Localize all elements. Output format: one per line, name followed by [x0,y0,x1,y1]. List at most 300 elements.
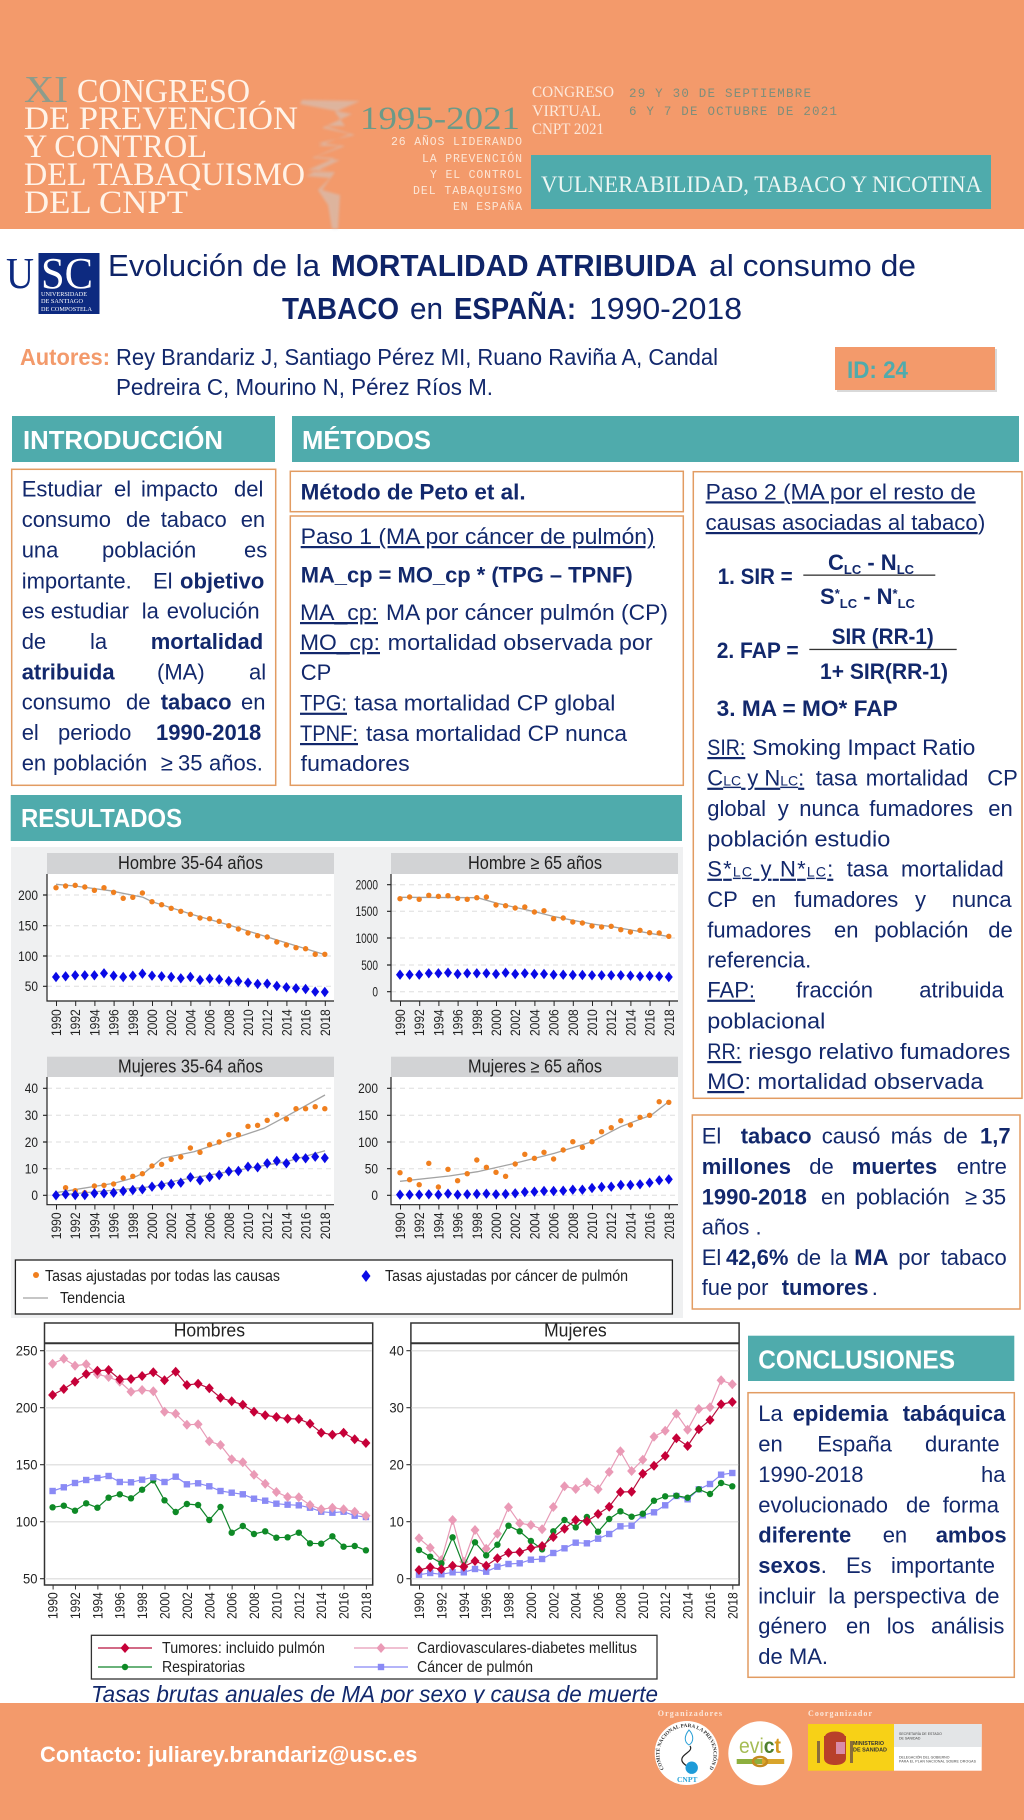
chart: Mujeres ≥ 65 años: Mujeres ≥ 65 años [468,1056,602,1076]
chart: Hombres por causa: 2010 [269,1592,285,1619]
formula: SIR: LC [844,562,862,577]
text block: definiciones paso 2: de [988,917,1013,942]
panel: resultados principales: 35 [982,1184,1006,1209]
chart: Hombres por causa: 50 [23,1571,38,1587]
chart: Mujeres por causa: 2002 [545,1592,562,1619]
panel: conclusiones: sexos [758,1553,821,1578]
panel: resultados principales: tumores [782,1275,868,1300]
panel: conclusiones: epidemia [793,1401,889,1426]
text block: introducción: años. [209,750,263,775]
chart: Hombres por causa: 250 [16,1343,38,1359]
panel: conclusiones: La [758,1401,784,1426]
text block: introducción: atribuida [22,659,115,684]
congress format: VIRTUAL [532,103,601,120]
text block: introducción: es [244,538,267,563]
panel: conclusiones: en [846,1614,870,1639]
chart: Mujeres por causa: 2018 [724,1592,741,1619]
text block: introducción: la [90,629,108,654]
chart: Hombre ≥ 65 años: 1000 [356,930,378,946]
chart: Mujeres por causa: 1992 [434,1592,450,1619]
text block: definiciones paso 2 [707,735,1018,1094]
chart: Hombre 35-64 años: 50 [25,978,38,994]
anniversary tagline: LA PREVENCIÓN [422,152,522,166]
chart: Mujeres ≥ 65 años: 1998 [469,1212,485,1239]
legend: tasas ajustadas [15,1260,672,1314]
legend: causas de muerte: Cardiovasculares-diabetes mellitus [417,1640,637,1657]
panel: resultados principales: millones [702,1154,791,1179]
chart: Hombre ≥ 65 años: Hombre ≥ 65 años [468,853,602,873]
chart: Mujeres ≥ 65 años: 1992 [411,1212,427,1239]
title: TABACO [282,291,399,326]
chart: Mujeres por causa: Mujeres [544,1321,607,1341]
chart: Mujeres por causa: 2004 [568,1592,584,1619]
heading: paso 2 [706,479,985,535]
legend: causas de muerte [91,1635,657,1679]
chart: Hombres por causa: 2000 [157,1592,173,1619]
heading: introducción: INTRODUCCIÓN [23,425,223,455]
icon: smoke wisp [300,100,360,229]
logo: USC: SC [41,249,93,298]
panel: conclusiones: importante [891,1553,995,1578]
text block: definiciones paso 2: en [834,917,858,942]
logo: Ministerio de Sanidad: MINISTERIO [853,1741,885,1747]
text block: introducción: periodo [58,720,131,745]
text block: definiciones paso 2: CP [707,887,738,912]
chart: Mujeres 35-64 años: 10 [25,1161,38,1177]
chart: Mujeres 35-64 años: 2000 [144,1212,160,1239]
text block: definiciones paso 2: atribuida [919,978,1004,1003]
title: congress name: Y CONTROL [24,129,207,165]
title: congress name [24,69,305,221]
chart: Hombre 35-64 años: 200 [18,887,38,903]
chart: Hombres por causa: 2004 [201,1592,218,1619]
text block: definiciones paso 2: poblacional [707,1008,825,1033]
logo: USC: UNIVERSIDADE [41,292,87,298]
text block: introducción: 35 [178,750,202,775]
chart: Mujeres por causa: 2006 [590,1592,606,1619]
chart: Mujeres 35-64 años: 20 [25,1134,38,1150]
badge: ID [835,347,997,392]
formula: SIR: LC [897,562,915,577]
chart: Hombre 35-64 años: 1994 [87,1009,103,1036]
title: congress name: DEL TABAQUISMO [24,157,305,193]
logo: USC: DE SANTIAGO [41,299,83,305]
heading: introducción [12,416,275,462]
title: ESPAÑA: [454,291,576,326]
panel: resultados principales: más [891,1123,932,1148]
legend: causas de muerte: Respiratorias [162,1659,245,1676]
chart: Mujeres por causa: 1994 [456,1592,472,1619]
chart: Hombre 35-64 años: 1996 [106,1009,122,1036]
title: congress name: CONGRESO [77,73,250,110]
text block: definiciones paso 1: tasa mortalidad CP global [354,691,615,716]
logo: CNPT [654,1721,719,1785]
theme banner: VULNERABILIDAD, TABACO Y NICOTINA [541,172,982,197]
chart: Mujeres 35-64 años: 2018 [317,1212,333,1239]
chart: Mujeres por causa: 2000 [523,1592,539,1619]
panel: conclusiones: ambos [936,1523,1007,1548]
panel: resultados principales: en [821,1184,845,1209]
label: coorganizador: Coorganizador [808,1709,872,1718]
chart: Mujeres ≥ 65 años: 2002 [507,1212,523,1239]
text block: definiciones paso 2: S*LC y N*LC: [707,857,833,882]
text block: introducción: importante. [22,568,132,593]
chart: Mujeres 35-64 años: 2002 [163,1212,179,1239]
text block: introducción: ≥ [161,750,173,775]
text block: introducción: tabaco [161,690,232,715]
chart: Mujeres por causa: 1990 [411,1592,427,1619]
logo: Ministerio de Sanidad: DE SANIDAD [853,1748,887,1754]
panel: conclusiones: perspectiva [853,1583,967,1608]
panel: resultados principales: El [702,1245,721,1270]
panel: conclusiones: ha [981,1462,1006,1487]
chart: Mujeres por causa: 2012 [657,1592,673,1619]
chart: Mujeres por causa: 1998 [501,1592,517,1619]
chart: Hombre 35-64 años: 2018 [317,1009,333,1036]
chart: Mujeres 35-64 años: 2014 [279,1212,295,1239]
panel: resultados principales: muertes [852,1154,937,1179]
text block: introducción: una [22,538,59,563]
panel: conclusiones: evolucionado [758,1492,888,1517]
formula: SIR: 1. SIR = [718,564,793,589]
chart: Hombre ≥ 65 años: 1500 [356,903,378,919]
heading: paso 2: Paso 2 (MA por el resto de [706,479,976,504]
chart: Mujeres ≥ 65 años: 100 [358,1134,378,1150]
text block: introducción: El [153,568,173,593]
text block: definiciones paso 1: MA_cp: [300,600,378,625]
chart: Hombres por causa: 1994 [90,1592,106,1619]
text block: definiciones paso 2: y [915,887,926,912]
panel: conclusiones: Es [846,1553,872,1578]
chart: Mujeres ≥ 65 años: 1996 [450,1212,466,1239]
chart: Mujeres por causa: 2016 [702,1592,718,1619]
chart: Hombres por causa: 2002 [179,1592,195,1619]
text block: introducción: el [22,720,39,745]
chart: Mujeres 35-64 años: 1992 [67,1212,83,1239]
chart: Mujeres 35-64 años: 2010 [240,1212,256,1239]
congress format: CONGRESO [532,84,614,101]
text block: introducción [22,477,267,775]
text block: introducción: población [53,750,147,775]
panel: conclusiones: diferente [758,1523,851,1548]
text block: introducción: la [142,598,160,623]
chart: Hombre ≥ 65 años [356,853,678,1036]
panel: conclusiones: forma [943,1492,1000,1517]
logo: Ministerio de Sanidad: DE SANIDAD [899,1736,921,1740]
text block: introducción: mortalidad [151,629,263,654]
formula: SIR: * [893,586,899,601]
formula: SIR: C [828,550,844,575]
chart: Hombre ≥ 65 años: 2016 [642,1009,658,1036]
authors [20,344,718,400]
text block: definiciones paso 2: SIR: [707,735,745,760]
text block: definiciones paso 2: en [752,887,776,912]
congress format: CNPT 2021 [532,121,604,138]
chart: Mujeres 35-64 años: 40 [25,1080,38,1096]
chart: Mujeres por causa: 2008 [613,1592,629,1619]
panel: resultados principales: tabaco [741,1123,812,1148]
chart: Hombres por causa: 1990 [45,1592,61,1619]
panel: conclusiones: en [883,1523,907,1548]
chart: Hombre 35-64 años: 2016 [298,1009,314,1036]
logo: Ministerio de Sanidad: PARA EL PLAN NACIONAL SOBRE DROGAS [899,1760,977,1764]
text block: introducción: evolución [167,598,260,623]
title [108,248,916,326]
chart: Mujeres ≥ 65 años: 200 [358,1080,378,1096]
panel: conclusiones [748,1393,1014,1677]
panel: resultados principales: la [830,1245,848,1270]
chart: Hombre ≥ 65 años: 2014 [623,1009,639,1036]
logo: evict [728,1721,792,1785]
caption: tasas brutas: Tasas brutas anuales de MA por sexo y causa de muerte [91,1681,658,1707]
text block: definiciones paso 2: fracción [796,978,873,1003]
formula: SIR: - N [861,550,897,575]
text block: definiciones paso 2: mortalidad [866,766,968,791]
congress format [532,84,614,138]
formula: MA: 3. MA = MO* FAP [717,696,898,721]
chart: Hombre ≥ 65 años: 500 [361,957,378,973]
heading: conclusiones [748,1336,1014,1381]
chart: Mujeres ≥ 65 años: 2016 [642,1212,658,1239]
text block: definiciones paso 2: riesgo relativo fumadores [748,1039,1010,1064]
panel: conclusiones: durante [925,1432,1000,1457]
panel: resultados principales: causó [822,1123,880,1148]
text block: introducción: (MA) [157,659,205,684]
anniversary tagline: Y EL CONTROL [430,169,522,182]
text block: definiciones paso 1: fumadores [301,751,410,776]
text block: definiciones paso 2: nunca [952,887,1012,912]
text block: definiciones paso 2: CLC y NLC: [707,766,804,791]
legend: tasas ajustadas: Tendencia [60,1290,125,1307]
anniversary tagline: EN ESPAÑA [453,201,522,214]
chart: Hombre 35-64 años: 1998 [125,1009,141,1036]
logo: USC: DE COMPOSTELA [41,307,93,313]
chart: Mujeres ≥ 65 años: 2004 [527,1212,543,1239]
chart: Hombre ≥ 65 años: 1994 [431,1009,447,1036]
chart: Mujeres ≥ 65 años: 2006 [546,1212,562,1239]
chart: Hombre 35-64 años: 2002 [163,1009,179,1036]
text block: definiciones paso 2: tasa [816,766,858,791]
chart: Hombres por causa [16,1321,374,1619]
heading: métodos [292,416,1019,462]
chart: Hombre 35-64 años [18,853,334,1036]
text block: definiciones paso 1 [300,600,668,776]
panel: resultados principales [692,1115,1020,1309]
chart: Hombre ≥ 65 años: 1998 [469,1009,485,1036]
chart: Mujeres ≥ 65 años: 1994 [431,1212,447,1239]
chart: Hombres por causa: 200 [16,1400,38,1416]
chart: Mujeres 35-64 años: 1998 [125,1212,141,1239]
chart: Hombres por causa: 100 [16,1514,38,1530]
chart: Hombre ≥ 65 años: 2000 [356,877,378,893]
panel: resultados principales: entre [957,1154,1007,1179]
chart: Mujeres 35-64 años: 2006 [202,1212,218,1239]
chart: Mujeres 35-64 años: 0 [31,1187,38,1203]
logo: Ministerio de Sanidad [808,1724,982,1771]
panel: resultados principales: ≥ [965,1184,977,1209]
chart: Hombre 35-64 años: 1992 [67,1009,83,1036]
chart: Hombre 35-64 años: 2012 [259,1009,275,1036]
formula: SIR: * [835,586,841,601]
panel: método de Peto: Método de Peto et al. [301,479,526,504]
text block: introducción: en [241,507,265,532]
panel: resultados principales: por [737,1275,768,1300]
text block: definiciones paso 2: fumadores [869,796,973,821]
formula: FAP [717,624,957,684]
text block: introducción: impacto [141,477,218,502]
heading: métodos: MÉTODOS [302,425,431,455]
chart: Hombres por causa: Hombres [174,1321,245,1341]
chart: Hombre ≥ 65 años: 0 [372,984,378,1000]
chart: Hombres por causa: 2018 [358,1592,374,1619]
congress dates [629,87,837,119]
legend: causas de muerte: Cáncer de pulmón [417,1659,533,1676]
panel: introducción [12,469,276,785]
title: congress name: DE PREVENCIÓN [24,99,298,137]
formula: SIR: - N [857,584,893,609]
text block: definiciones paso 1: TPG: [300,691,347,716]
chart: Mujeres por causa: 10 [389,1514,404,1530]
chart: Mujeres 35-64 años: 2008 [221,1212,237,1239]
chart: Hombre 35-64 años: 2004 [183,1009,199,1036]
formula: SIR [718,550,935,611]
text block: definiciones paso 2: global [707,796,766,821]
formula: SIR: LC [840,596,858,611]
panel: método de Peto [290,471,683,512]
panel: paso 1 [290,516,683,785]
text block: definiciones paso 1: mortalidad observada por [388,630,653,655]
text block: introducción: de [22,629,46,654]
text block: definiciones paso 2: referencia. [707,948,811,973]
chart: Hombre ≥ 65 años: 2010 [584,1009,600,1036]
chart: Mujeres por causa: 40 [389,1343,404,1359]
logo: evict: evict [739,1735,781,1758]
theme banner [531,155,991,209]
text block: definiciones paso 2: tasa [847,857,889,882]
chart: Hombre ≥ 65 años: 1996 [450,1009,466,1036]
panel: gráficos de tasas ajustadas [11,847,683,1318]
chart: Hombre ≥ 65 años: 2004 [527,1009,543,1036]
chart: Hombre ≥ 65 años: 2008 [565,1009,581,1036]
text block: definiciones paso 1: CP [301,660,331,685]
panel: conclusiones: España [817,1432,893,1457]
chart: Mujeres 35-64 años [25,1056,334,1239]
chart: Mujeres 35-64 años: 1996 [106,1212,122,1239]
anniversary tagline: DEL TABAQUISMO [413,185,522,198]
panel: conclusiones: los [887,1614,915,1639]
title: congress name: XI [24,69,68,111]
authors: Pedreira C, Mourino N, Pérez Ríos M. [116,374,493,400]
logo: USC: U [6,249,34,298]
chart: Mujeres ≥ 65 años: 2008 [565,1212,581,1239]
text block: definiciones paso 2: CP [987,766,1018,791]
chart: Hombre 35-64 años: 2010 [240,1009,256,1036]
panel: conclusiones: de MA. [758,1644,828,1669]
text block: definiciones paso 2: nunca [799,796,860,821]
chart: Mujeres por causa: 20 [389,1457,404,1473]
panel: resultados principales: por [898,1245,930,1270]
chart: Hombre ≥ 65 años: 1992 [411,1009,427,1036]
formula: FAP: 2. FAP = [717,638,799,663]
formula: SIR: S [820,584,835,609]
chart: Mujeres ≥ 65 años: 50 [365,1161,378,1177]
authors: Rey Brandariz J, Santiago Pérez MI, Ruano Raviña A, Candal [116,344,718,370]
text block: introducción: en [22,750,46,775]
formula: MA_cp: MA_cp = MO_cp * (TPG – TPNF) [301,562,633,587]
chart: Hombre ≥ 65 años: 2012 [603,1009,619,1036]
text block: introducción: Estudiar [22,477,102,502]
chart: Hombre ≥ 65 años: 2000 [488,1009,504,1036]
chart: Hombre 35-64 años: 2008 [221,1009,237,1036]
contact: Contacto: juliarey.brandariz@usc.es [40,1742,418,1767]
text block: introducción: tabaco [161,507,227,532]
chart: Mujeres 35-64 años: 2004 [183,1212,199,1239]
panel: resultados principales: El [702,1123,721,1148]
chart: Mujeres 35-64 años: 2012 [259,1212,275,1239]
legend: tasas ajustadas: Tasas ajustadas por cáncer de pulmón [385,1268,628,1285]
text block: definiciones paso 1: tasa mortalidad CP nunca [366,721,628,746]
panel: resultados principales: 42,6% [726,1245,788,1270]
panel: conclusiones: 1990-2018 [758,1462,864,1487]
text block: definiciones paso 2: población estudio [707,826,890,851]
chart: Mujeres 35-64 años: 2016 [298,1212,314,1239]
panel: conclusiones: de [906,1492,930,1517]
chart: Mujeres ≥ 65 años [358,1056,678,1239]
logo: Ministerio de Sanidad: SECRETARÍA DE ESTADO [899,1732,942,1736]
chart: Mujeres ≥ 65 años: 0 [371,1187,378,1203]
title: al consumo de [709,248,916,283]
panel: conclusiones: la [828,1583,846,1608]
chart: Mujeres 35-64 años: 1990 [48,1212,64,1239]
logo: Ministerio de Sanidad: DELEGACIÓN DEL GOBIERNO [899,1754,950,1760]
panel: conclusiones: análisis [931,1614,1004,1639]
title: MORTALIDAD ATRIBUIDA [331,248,697,283]
chart: Mujeres 35-64 años: 30 [25,1107,38,1123]
panel: resultados principales: . [872,1275,878,1300]
chart: Hombres por causa: 2012 [291,1592,307,1619]
chart: Hombres por causa: 150 [16,1457,38,1473]
congress dates: 29 Y 30 DE SEPTIEMBRE [629,87,811,101]
chart: Mujeres ≥ 65 años: 2000 [488,1212,504,1239]
title: Evolución de la [108,248,321,283]
chart: Mujeres ≥ 65 años: 2012 [603,1212,619,1239]
panel: conclusiones: género [758,1614,827,1639]
text block: definiciones paso 1: TPNF: [300,721,358,746]
title: congress name: DEL CNPT [24,185,188,221]
chart: Hombre ≥ 65 años: 2018 [661,1009,677,1036]
text block: definiciones paso 2: en [988,796,1013,821]
authors: Autores: [20,344,110,370]
heading: paso 1: Paso 1 (MA por cáncer de pulmón) [301,524,655,549]
text block: definiciones paso 2: mortalidad [901,857,1004,882]
text block: definiciones paso 2: y [778,796,789,821]
chart: Hombres por causa: 1992 [67,1592,83,1619]
chart: Mujeres ≥ 65 años: 2014 [623,1212,639,1239]
panel: conclusiones: incluir [758,1583,816,1608]
heading: paso 2: causas asociadas al tabaco [706,510,978,535]
chart: Mujeres por causa: 2010 [635,1592,651,1619]
logo: CNPT: COMITÉ NACIONAL PARA LA PREVENCIÓN DEL TABAQUISMO [655,1724,718,1770]
text block: definiciones paso 2: Smoking Impact Ratio [752,735,975,760]
panel: conclusiones: en [758,1432,783,1457]
logo: USC [6,249,100,314]
text block: definiciones paso 2: población [874,917,968,942]
text block: introducción: el [114,477,131,502]
badge: ID: ID: 24 [847,357,909,384]
text block: definiciones paso 2: fumadores [794,887,898,912]
panel: resultados principales: 1,7 [980,1123,1011,1148]
formula: FAP: 1+ SIR(RR-1) [820,659,948,684]
